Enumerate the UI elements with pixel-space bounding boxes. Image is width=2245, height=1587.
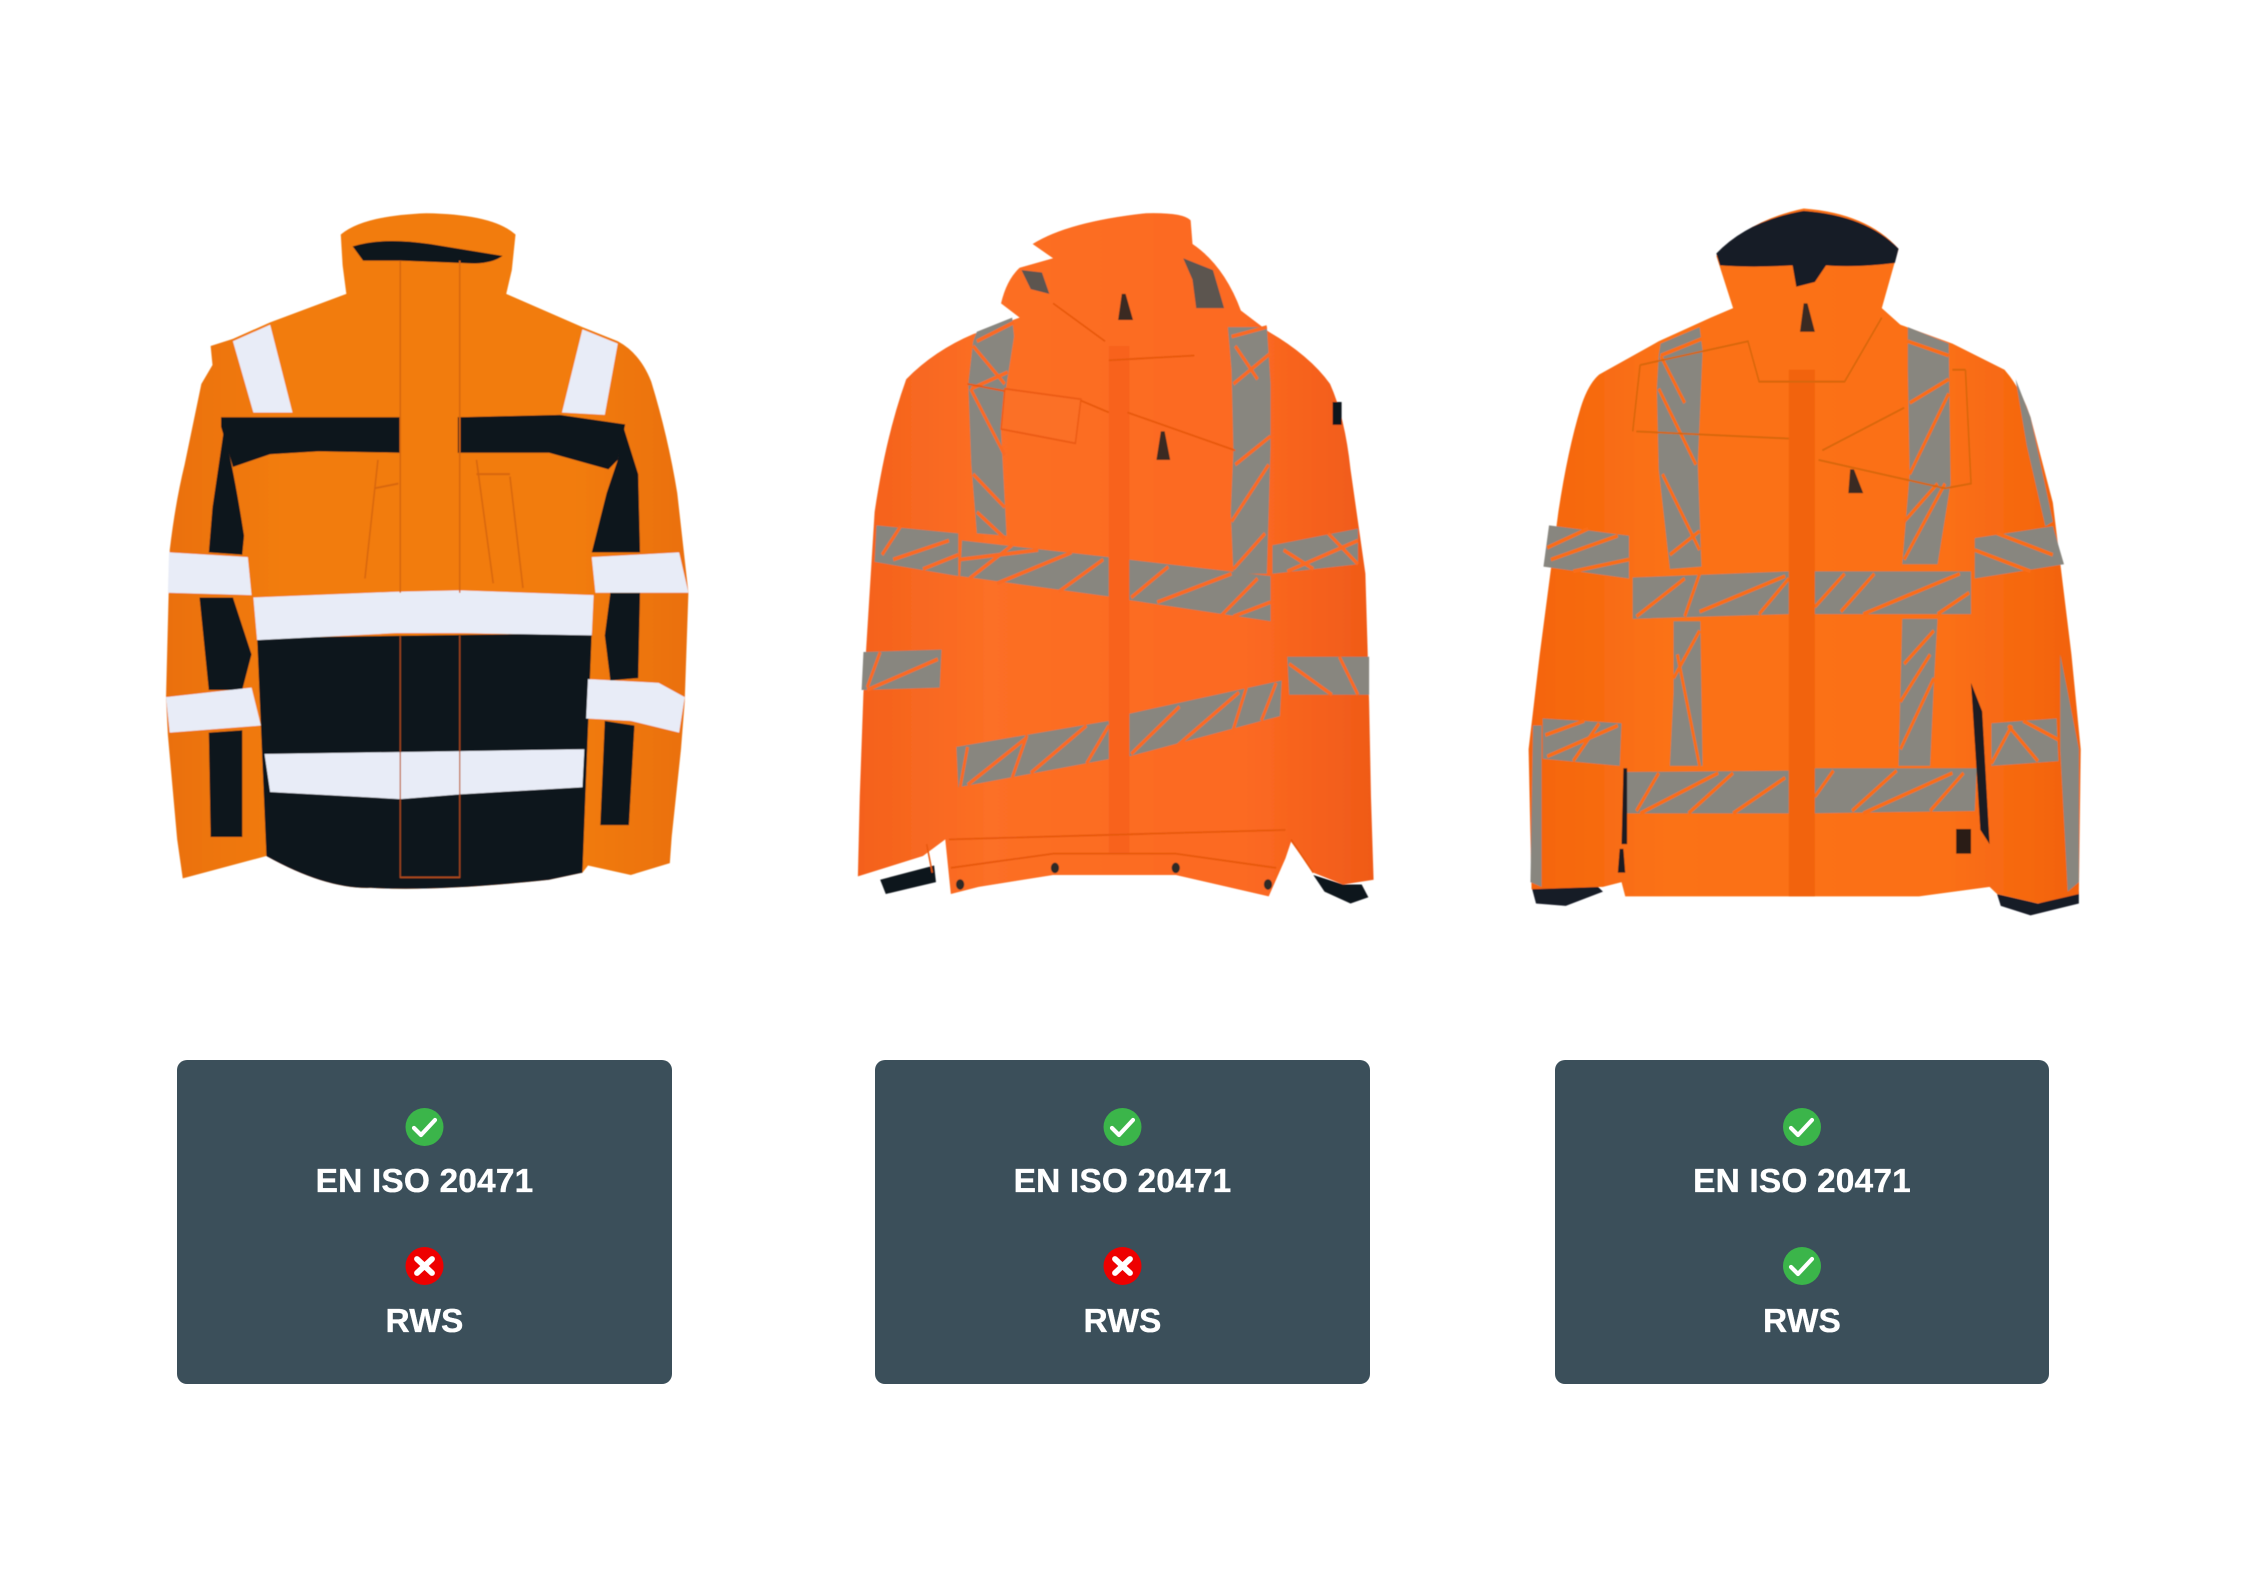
jacket 2 black cuffs <box>880 866 1368 903</box>
card 2: standards status <box>875 1060 1370 1384</box>
icon: red cross <box>406 1247 444 1285</box>
jacket 3: hi-vis orange softshell jacket <box>1529 208 2081 915</box>
card 3: standards status <box>1555 1060 2049 1384</box>
label: EN ISO 20471: EN ISO 20471 <box>1014 1163 1231 1200</box>
jacket 2 zipper pulls <box>1118 294 1170 460</box>
jacket 2 zip placket <box>1109 346 1129 854</box>
jacket 3 logo badge <box>1956 829 1971 854</box>
jacket 3 collar lining <box>1716 211 1899 287</box>
jacket 1 navy sleeve panels <box>199 427 640 837</box>
jacket 2 snaps <box>956 863 1272 890</box>
jacket 2 chest pocket flap <box>1001 389 1081 443</box>
jacket 1 collar lining <box>353 241 503 263</box>
label: RWS: RWS <box>1763 1303 1841 1340</box>
icon: red cross <box>1104 1247 1142 1285</box>
label: RWS: RWS <box>385 1303 464 1340</box>
jacket 1 placket seams <box>365 261 523 877</box>
icon: green check <box>1783 1108 1821 1146</box>
jacket 3 zipper pulls <box>1800 303 1863 493</box>
jacket 3 body <box>1529 208 2081 903</box>
label: EN ISO 20471: EN ISO 20471 <box>1693 1163 1911 1200</box>
jacket 3 reflective stripe lines <box>1545 339 2058 813</box>
jacket 1 lower navy panel <box>257 633 592 889</box>
icon: green check <box>1104 1108 1142 1146</box>
icon: green check <box>1783 1247 1821 1285</box>
jacket 2 body <box>858 213 1374 896</box>
jacket 3 black cuffs <box>1532 884 2079 915</box>
jacket 1 navy yoke <box>221 415 625 469</box>
icon: green check <box>406 1108 444 1146</box>
jacket 2 hood lining <box>1021 258 1224 308</box>
jacket 3 side slits <box>1618 683 1990 873</box>
jacket 3 zip placket <box>1789 370 1815 896</box>
jacket 2 seams and hem <box>927 303 1313 873</box>
jacket 2 reflective stripe lines <box>867 322 1358 787</box>
label: RWS: RWS <box>1083 1303 1162 1340</box>
jacket 3 seams <box>1633 318 1971 488</box>
jacket 1: orange and navy jacket with silver bands <box>166 213 688 889</box>
jacket 1 reflective bands <box>166 325 688 799</box>
jacket 2 reflective bands <box>862 318 1369 787</box>
jacket 1 body <box>166 213 688 889</box>
label: EN ISO 20471: EN ISO 20471 <box>316 1163 533 1200</box>
card 1: standards status <box>177 1060 672 1384</box>
jacket 2: hi-vis orange hooded jacket <box>858 213 1374 903</box>
jacket 3 reflective bands <box>1530 327 2079 892</box>
jacket 2 sleeve badge <box>1333 402 1342 425</box>
